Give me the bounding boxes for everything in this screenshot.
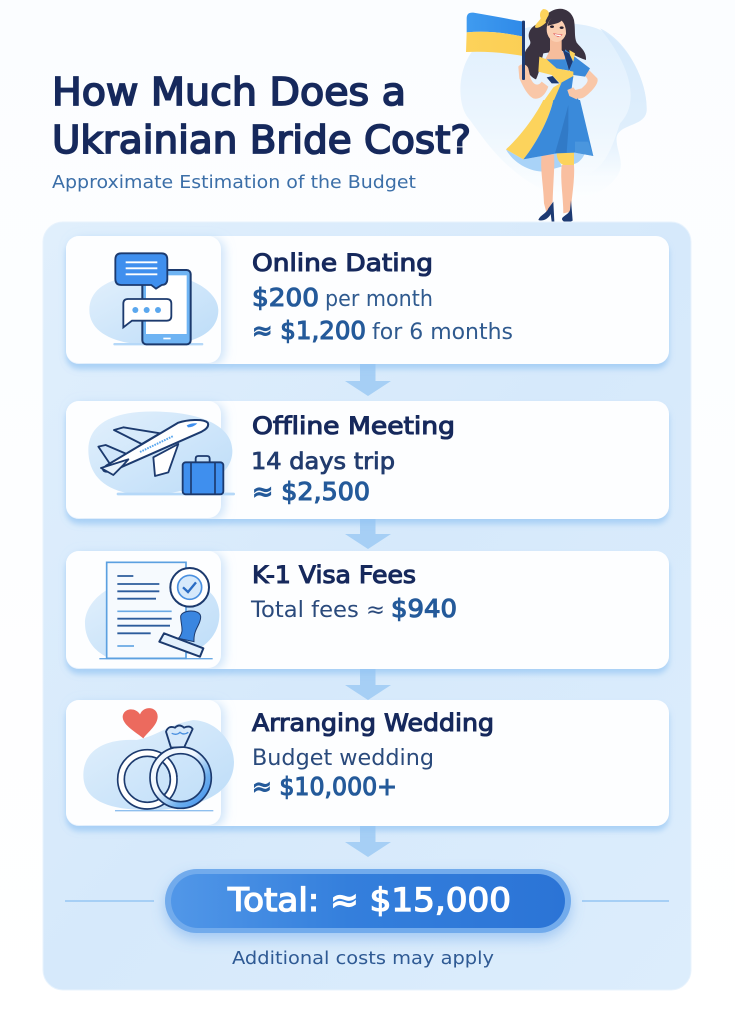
text: visa fees: Total fees ≈ bbox=[250, 598, 385, 623]
text: arranging wedding: Budget wedding bbox=[252, 746, 434, 771]
flag bbox=[466, 13, 523, 56]
text: online dating: per month bbox=[325, 287, 433, 312]
icon: heart and wedding rings bbox=[83, 708, 234, 811]
panel: online dating bbox=[66, 236, 669, 364]
text: visa fees: $940 bbox=[391, 594, 457, 623]
text: online dating: Online Dating bbox=[252, 249, 433, 277]
subtitle: Approximate Estimation of the Budget bbox=[52, 172, 416, 193]
panel: offline meeting bbox=[66, 401, 669, 519]
text: offline meeting: 14 days trip bbox=[251, 449, 395, 475]
text: online dating: for 6 months bbox=[372, 320, 513, 345]
text: offline meeting: Offline Meeting bbox=[252, 412, 455, 440]
total row bbox=[65, 869, 669, 933]
arrow: step 1 to 2 bbox=[345, 364, 391, 396]
text: arranging wedding: Arranging Wedding bbox=[252, 709, 494, 737]
figure: upper body bbox=[518, 9, 598, 102]
title: Ukrainian Bride Cost? bbox=[52, 118, 471, 162]
text: online dating bbox=[252, 249, 513, 345]
text: arranging wedding bbox=[252, 709, 494, 801]
total pill: Total: ≈ $15,000 bbox=[227, 881, 511, 919]
title bbox=[52, 70, 471, 162]
text: visa fees: K-1 Visa Fees bbox=[252, 561, 416, 589]
text: offline meeting: ≈ $2,500 bbox=[252, 477, 370, 506]
arrow: step 2 to 3 bbox=[345, 519, 391, 549]
figure: skirt and legs bbox=[506, 100, 593, 222]
illustration: woman with Ukrainian flag bbox=[460, 9, 647, 222]
panel: arranging wedding bbox=[66, 700, 669, 826]
panel: K-1 visa fees bbox=[66, 551, 669, 669]
icon: visa document and stamp bbox=[85, 562, 219, 659]
text: offline meeting bbox=[251, 412, 455, 506]
text: online dating: ≈ $1,200 bbox=[252, 316, 366, 345]
icon: phone with chat bubbles bbox=[89, 253, 218, 345]
background blob bbox=[460, 23, 647, 198]
footnote: Additional costs may apply bbox=[232, 948, 494, 969]
arrow: step 3 to 4 bbox=[345, 669, 391, 700]
total pill bbox=[165, 869, 571, 933]
icon: airplane and suitcase bbox=[88, 411, 235, 495]
panel: budget breakdown bbox=[43, 222, 691, 990]
arrow: step 4 to total bbox=[345, 826, 391, 857]
text: arranging wedding: ≈ $10,000+ bbox=[252, 772, 397, 801]
title: How Much Does a bbox=[52, 70, 406, 114]
text: visa fees bbox=[250, 561, 457, 623]
text: online dating: $200 bbox=[252, 283, 319, 312]
